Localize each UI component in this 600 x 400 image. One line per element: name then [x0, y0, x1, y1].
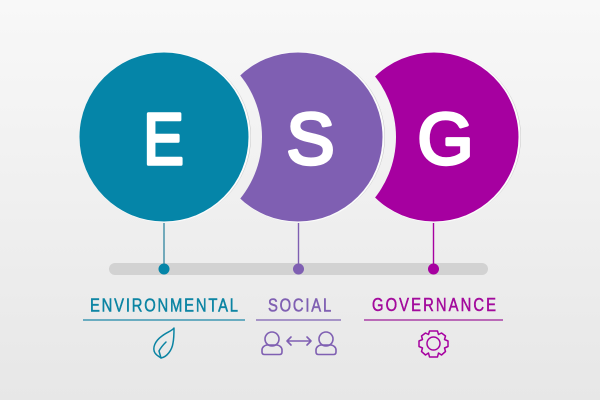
connector and dot: social — [293, 223, 304, 274]
label: environmental: ENVIRONMENTAL — [90, 295, 238, 316]
timeline bar — [109, 263, 488, 275]
icon: right person — [316, 332, 336, 354]
letter G: G — [417, 100, 474, 180]
icon: leaf — [154, 328, 174, 358]
letter E: E — [143, 100, 184, 180]
circle: S social — [240, 52, 385, 222]
icon: left person — [262, 332, 282, 354]
label: social: SOCIAL — [268, 295, 331, 316]
letter S: S — [286, 100, 335, 180]
icon: double arrow — [287, 337, 311, 345]
icon: gear — [419, 331, 448, 357]
connector and dot: governance — [428, 223, 439, 274]
label: social — [256, 295, 341, 320]
circle: G governance — [375, 52, 521, 222]
icon: people exchange — [262, 332, 336, 354]
connector and dot: environmental — [158, 223, 170, 274]
label: governance: GOVERNANCE — [372, 294, 496, 315]
circle: E environmental — [80, 52, 251, 222]
